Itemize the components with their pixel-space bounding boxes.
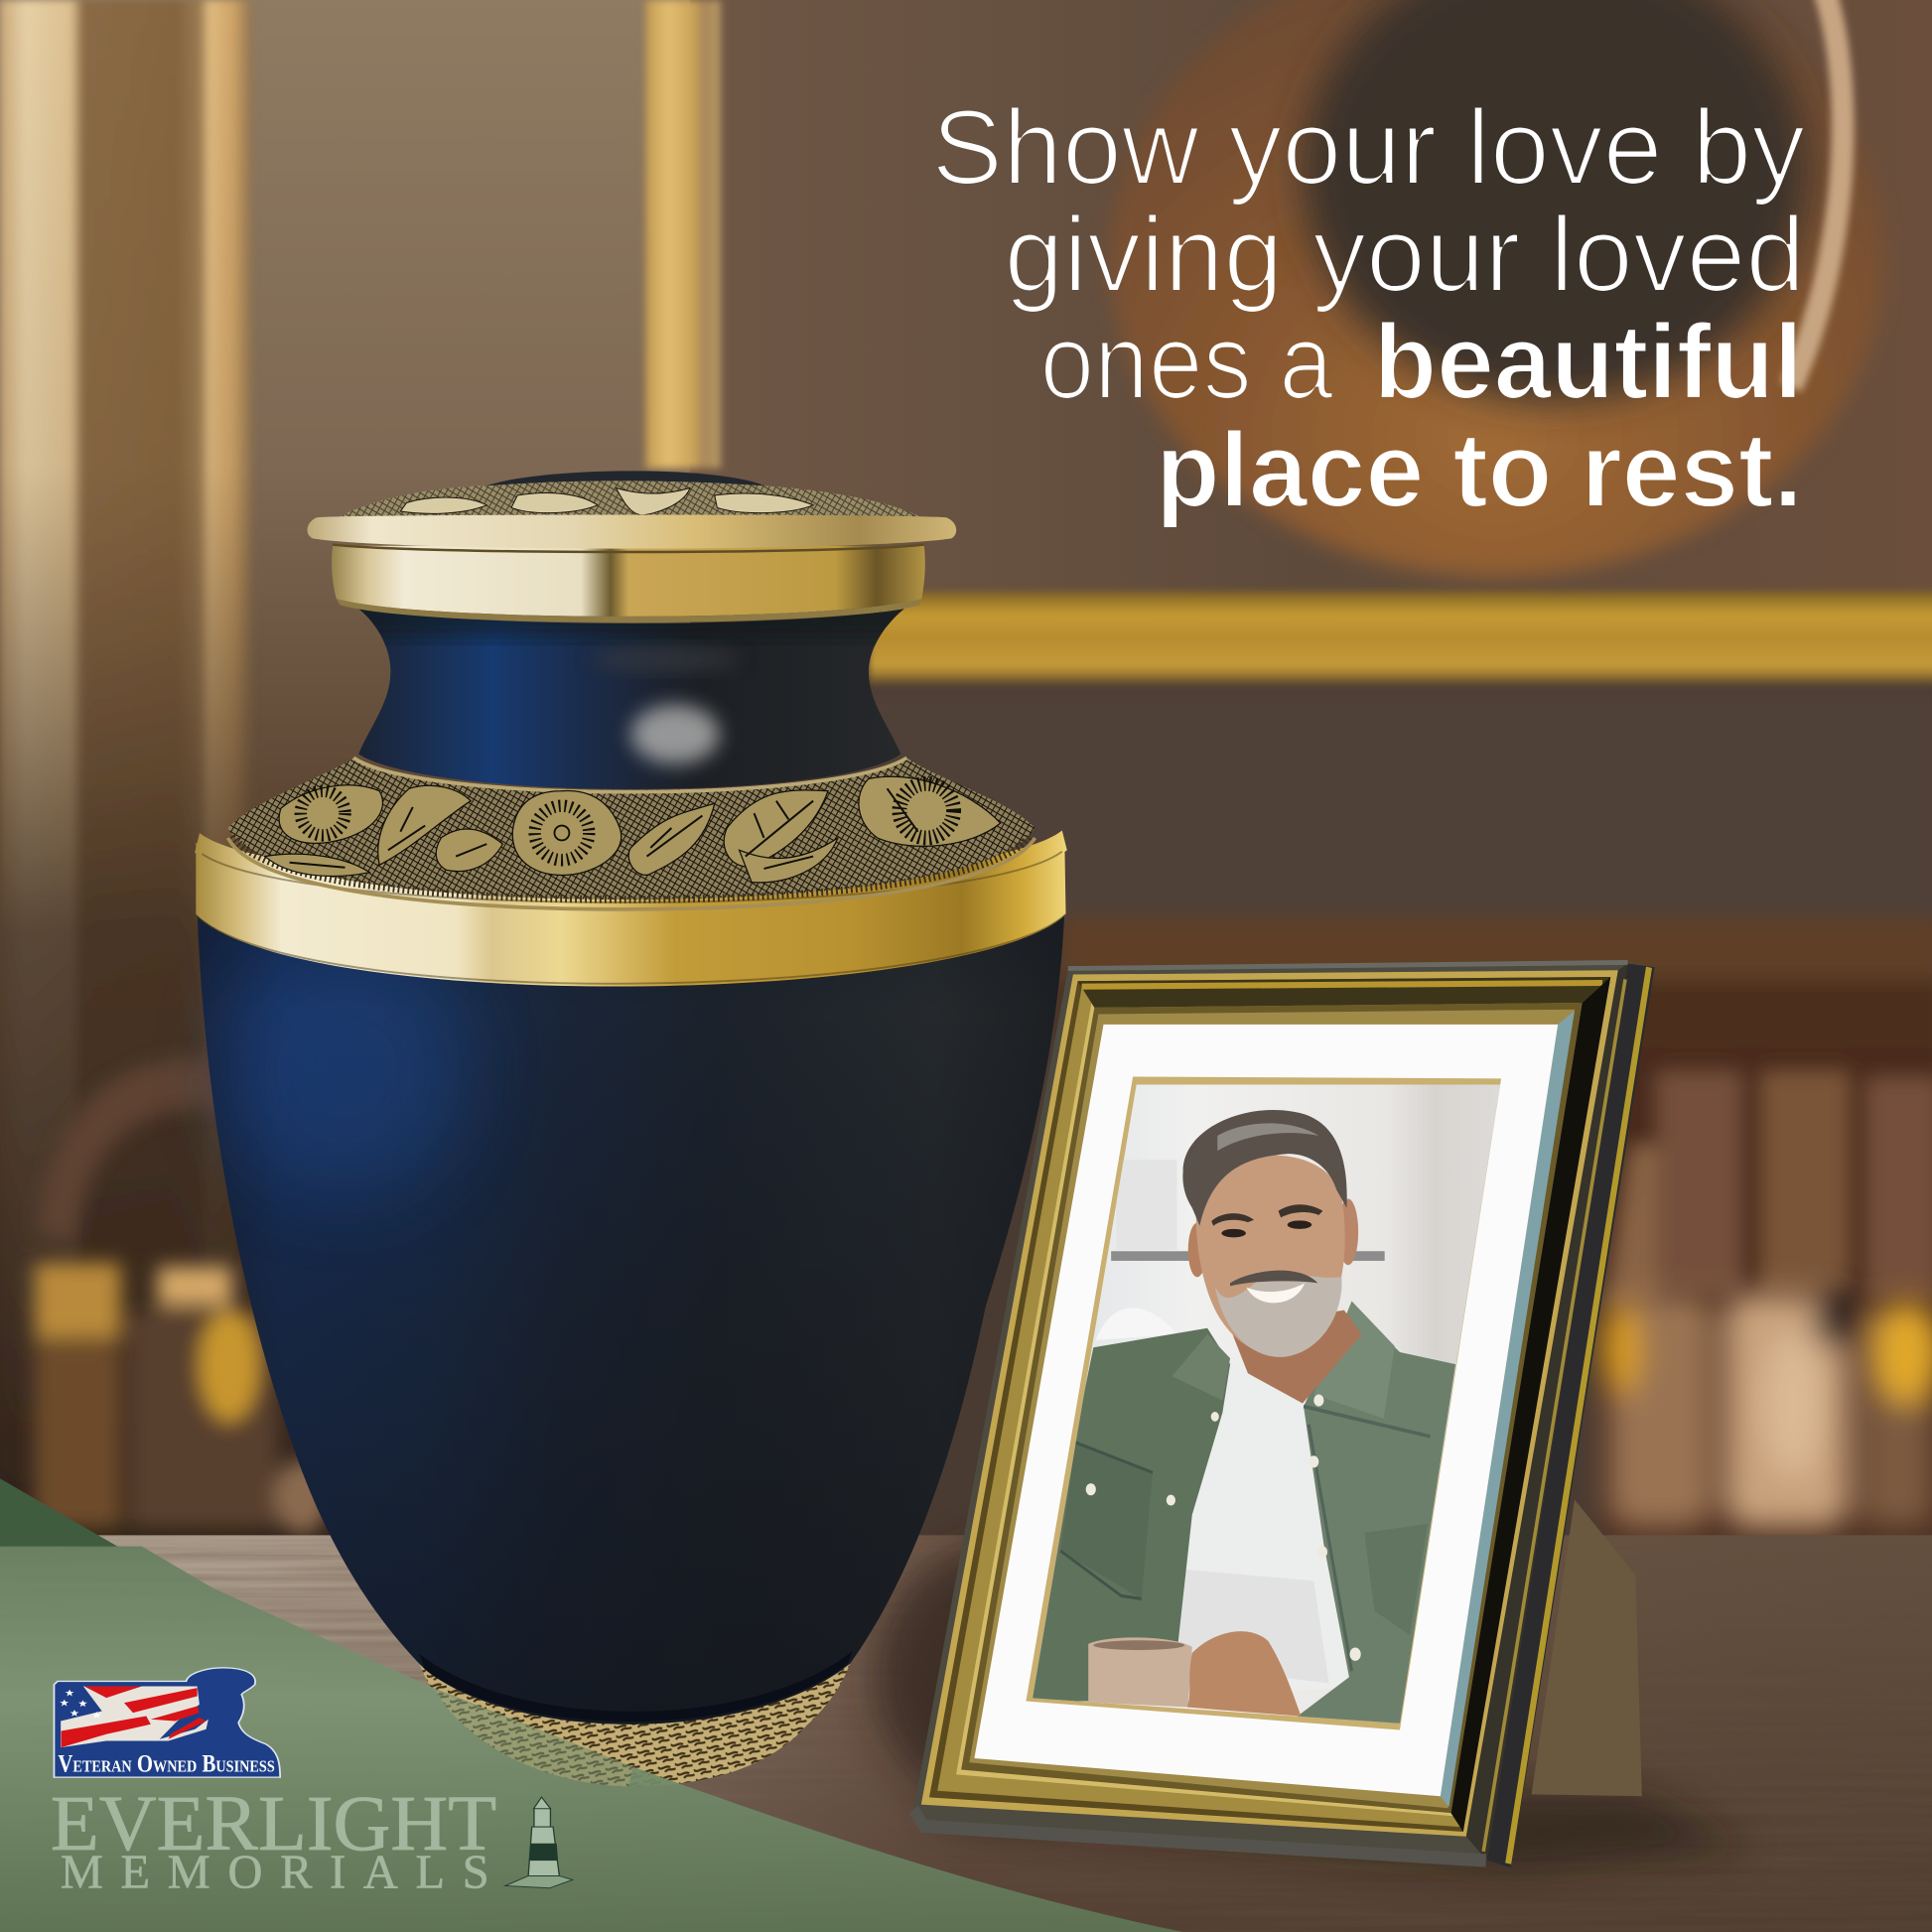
- frame inner gold lip: [969, 1010, 1575, 1808]
- urn foot: engraved base: [416, 1654, 853, 1787]
- urn body: navy to charcoal: [198, 909, 1064, 1725]
- badge artwork: flag and soldier: [54, 1668, 280, 1777]
- frame outer moulding: [913, 962, 1655, 1867]
- urn gold collar band: [195, 830, 1067, 987]
- veteran owned business badge: [54, 1668, 280, 1778]
- frame white mat: [974, 1025, 1558, 1796]
- blurred cushions right: [1601, 1289, 1932, 1528]
- portrait: ears and face: [1187, 1223, 1202, 1277]
- pillar: golden post: [645, 0, 721, 469]
- green brand wedge: [0, 1478, 1182, 1932]
- portrait photo: [1025, 1075, 1506, 1731]
- portrait: white tee: [1167, 1358, 1349, 1689]
- urn engraved shoulder: [228, 758, 1035, 909]
- everlight memorials logo: [51, 1780, 573, 1898]
- logo icon: lighthouse: [505, 1797, 573, 1888]
- portrait: olive jacket left: [1031, 1328, 1230, 1701]
- curtains: left light strips: [0, 0, 252, 1553]
- urn: [195, 471, 1067, 1787]
- headline line 3 regular part: ones a: [1039, 302, 1333, 421]
- frame teal glass sliver: [1441, 1011, 1575, 1807]
- portrait: hair: [1182, 1110, 1347, 1226]
- badge caption: Veteran Owned Business: [58, 1751, 275, 1778]
- logo wordmark: EVERLIGHT: EVERLIGHT: [51, 1780, 496, 1867]
- urn neck: [358, 609, 904, 789]
- table top with wood grain: [0, 1535, 1932, 1932]
- logo wordmark: MEMORIALS: MEMORIALS: [61, 1846, 489, 1898]
- portrait: olive jacket right: [1297, 1346, 1455, 1724]
- portrait: beard: [1215, 1271, 1342, 1357]
- headline line 3 bold part: beautiful: [1374, 302, 1803, 421]
- urn lid: [308, 471, 956, 622]
- portrait: neck: [1230, 1311, 1362, 1404]
- photo gold inset border: [1026, 1077, 1501, 1730]
- portrait: eyes and brows: [1211, 1204, 1322, 1237]
- portrait: hand: [1187, 1631, 1301, 1717]
- headline line 2: giving your loved: [1004, 195, 1805, 314]
- picture frame with portrait: [913, 962, 1655, 1867]
- gold shelf rail: [869, 592, 1932, 685]
- headline line 3: [1039, 302, 1803, 421]
- headline line 4: place to rest.: [1156, 410, 1803, 529]
- headline line 1: Show your love by: [931, 87, 1806, 207]
- wall mirror: blurred round frame: [1109, 0, 1885, 577]
- portrait: mug: [1088, 1637, 1192, 1708]
- portrait: smile: [1246, 1283, 1305, 1303]
- floral engraving motifs: [265, 776, 1001, 883]
- blurred objects left: [35, 1057, 329, 1534]
- lower wall and headboard: [863, 688, 1932, 1540]
- headline: [931, 87, 1806, 529]
- frame cardboard easel: [1532, 1499, 1642, 1796]
